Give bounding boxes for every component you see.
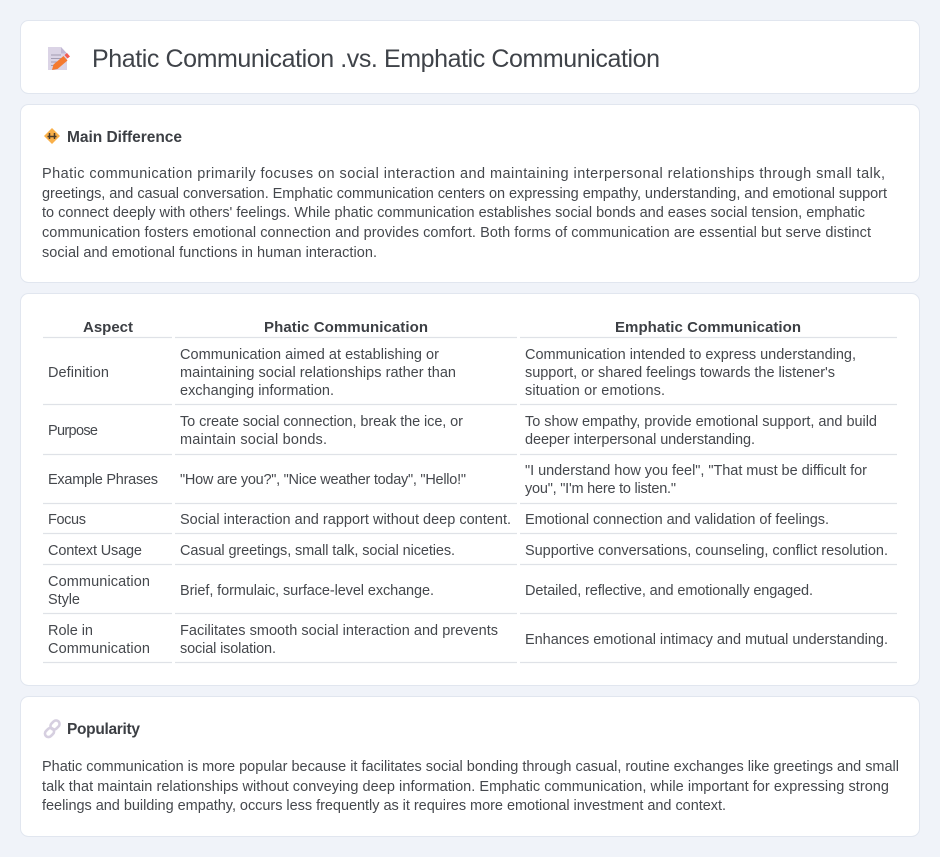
table row: definition: Communication aimed at establishing or [180,347,439,363]
table row: focus: Social interaction and rapport without deep content. [180,512,511,528]
title: Phatic Communication .vs. Emphatic Communication [92,45,660,73]
text block: main difference paragraph: social and emotional functions in human interaction. [42,245,377,261]
table row: communication style [48,574,813,608]
table row: example phrases [48,463,867,497]
text block: popularity paragraph: feelings and building empathy, occurs less frequently as it requires more emotional investment and context. [42,798,726,814]
table row: communication style: Brief, formulaic, surface-level exchange. [180,583,434,599]
table row: role in communication: Enhances emotional intimacy and mutual understanding. [525,632,888,648]
table row: role in communication: Communication [48,641,150,657]
table row: communication style: Communication [48,574,150,590]
table row: role in communication: social isolation. [180,641,276,657]
panel: comparison table [20,294,920,686]
table row: context usage [48,543,888,559]
table row: example phrases: Example Phrases [48,472,158,488]
table row: definition: Communication intended to express understanding, [525,347,856,363]
table header row [83,319,801,336]
table row: role in communication: Facilitates smooth social interaction and prevents [180,623,498,639]
table row: definition: maintaining social relationships rather than [180,365,456,381]
table row: context usage: Context Usage [48,543,142,559]
table row: definition: Definition [48,365,109,381]
text block: main difference paragraph: Phatic communication primarily focuses on social interaction and maintaining interpersonal relationships through small talk, [42,166,885,182]
table row: definition: exchanging information. [180,383,334,399]
heading: popularity: Popularity [67,721,140,738]
table header row: Emphatic Communication [615,319,801,336]
text block: popularity paragraph [42,759,899,814]
text block: main difference paragraph: to connect deeply with others' feelings. While phatic communication establishes social bonds and eases social tension, emphatic [42,205,865,221]
table row: focus [48,512,829,528]
table row: purpose: To show empathy, provide emotional support, and build [525,414,877,430]
icon: link [43,719,61,739]
table header row: Aspect [83,319,133,336]
table row: purpose: To create social connection, break the ice, or [180,414,463,430]
table row: purpose: Purpose [48,423,98,439]
panel: header [20,20,920,94]
table row: example phrases: "How are you?", "Nice weather today", "Hello!" [180,472,466,488]
icon: document with pencil [48,47,70,70]
panel: main difference [20,104,920,282]
text block: popularity paragraph: talk that maintain relationships without conveying deep information. Emphatic communication, while important for expressing strong [42,779,889,795]
panel: popularity [20,696,920,836]
text block: main difference paragraph: greetings, and casual conversation. Emphatic communication centers on expressing empathy, understanding, and emotional support [42,186,887,202]
text block: popularity paragraph: Phatic communication is more popular because it facilitates social bonding through casual, routine exchanges like greetings and small [42,759,899,775]
table header row: Phatic Communication [264,319,428,336]
table row: role in communication: Role in [48,623,93,639]
table row: definition: situation or emotions. [525,383,665,399]
table row: definition [48,347,856,399]
table row: communication style: Style [48,592,80,608]
heading: main difference: Main Difference [67,129,182,146]
table row: context usage: Supportive conversations, counseling, conflict resolution. [525,543,888,559]
table row: definition: support, or shared feelings towards the listener's [525,365,835,381]
table row: purpose: maintain social bonds. [180,432,327,448]
table row: communication style: Detailed, reflective, and emotionally engaged. [525,583,813,599]
text block: main difference paragraph: communication fosters emotional connection and provides comfort. Both forms of communication are essential but serve distinct [42,225,871,241]
table row: purpose [48,414,877,448]
table row: role in communication [48,623,888,657]
icon: warning diamond [44,128,60,144]
table row: example phrases: "I understand how you feel", "That must be difficult for [525,463,867,479]
table row: context usage: Casual greetings, small talk, social niceties. [180,543,455,559]
table row: focus: Focus [48,512,86,528]
table row: focus: Emotional connection and validation of feelings. [525,512,829,528]
text block: main difference paragraph [42,166,887,261]
table row: example phrases: you", "I'm here to listen." [525,481,676,497]
table row: purpose: deeper interpersonal understanding. [525,432,755,448]
